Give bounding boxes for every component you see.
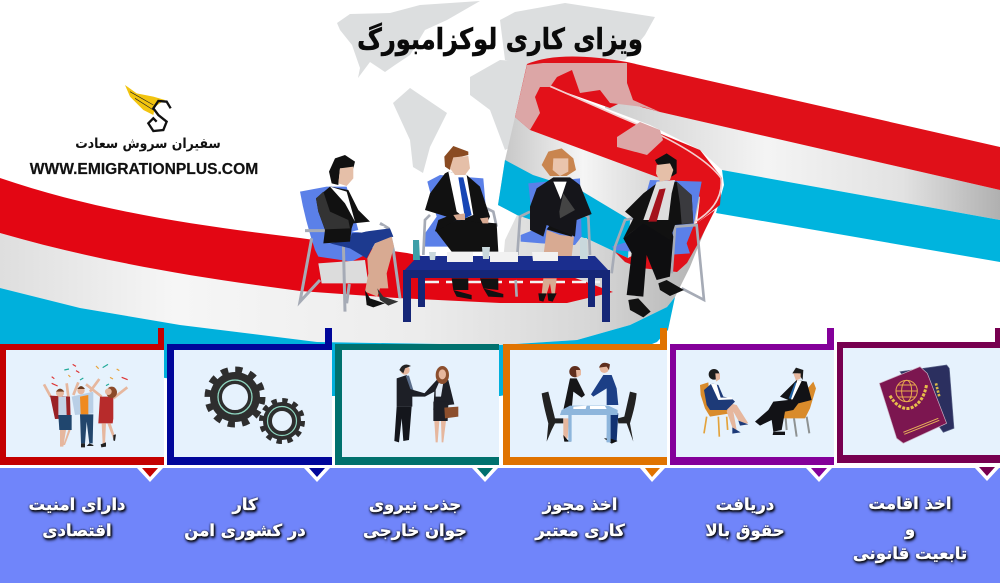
ribbon: right red curve <box>613 210 715 272</box>
label: residence and citizenship: تابعیت قانونی <box>853 544 967 563</box>
label: work in a safe country: کار <box>232 495 258 514</box>
icon: interview <box>700 368 816 437</box>
panel: work in a safe country <box>167 328 332 482</box>
person: seated man with red tie <box>612 153 704 317</box>
label: high salary <box>704 495 786 545</box>
person: seated woman with red hair <box>516 148 592 302</box>
label: attracting young foreign workers: جذب نیروی <box>369 495 461 514</box>
logo: company name: سفیران سروش سعادت <box>75 136 221 152</box>
label: economic security: اقتصادی <box>42 521 112 540</box>
ribbon: back blue band <box>716 170 1000 262</box>
label: residence and citizenship <box>852 494 970 568</box>
label: attracting young foreign workers <box>362 495 469 545</box>
label: residence and citizenship: اخذ اقامت <box>868 494 952 513</box>
ribbon: lower grey band <box>0 210 713 345</box>
label: attracting young foreign workers: جوان خارجی <box>363 521 467 540</box>
logo: yellow bird <box>125 85 171 131</box>
person: seated woman left <box>300 155 400 312</box>
panel: economic security <box>0 328 164 482</box>
conference table <box>403 238 610 322</box>
label: high salary: دریافت <box>716 495 774 514</box>
panel: valid work permit <box>503 328 667 482</box>
label: valid work permit: اخذ مجوز <box>543 495 617 514</box>
ribbon: back red band <box>527 56 1000 190</box>
icon: business meeting <box>542 363 637 444</box>
icon: celebrating people <box>44 364 128 447</box>
panel: residence and citizenship <box>837 328 1000 481</box>
panel: attracting young foreign workers <box>335 344 499 482</box>
ribbon: front white band <box>498 117 700 258</box>
conference illustration <box>300 146 704 322</box>
ribbon: front blue band <box>498 160 630 258</box>
website address: WWW.EMIGRATIONPLUS.COM <box>30 161 258 178</box>
ribbon: left red band <box>0 178 613 303</box>
world map <box>337 1 655 173</box>
title: ویزای کاری لوکزامبورگ <box>357 22 643 56</box>
label: economic security: دارای امنیت <box>29 495 125 514</box>
label: residence and citizenship: و <box>905 520 915 539</box>
label: work in a safe country <box>183 495 308 545</box>
map overlay on ribbon <box>515 63 663 155</box>
label: valid work permit: کاری معتبر <box>535 521 625 540</box>
ribbon: back white band <box>605 98 1000 220</box>
icon: gears <box>208 370 302 441</box>
icon: passports <box>879 365 954 443</box>
person: seated man with blue tie <box>423 146 503 299</box>
icon: handshake <box>394 365 458 442</box>
panel: high salary <box>670 328 834 482</box>
ribbon: left blue band <box>0 288 675 396</box>
label: work in a safe country: در کشوری امن <box>184 521 306 540</box>
ribbon: front red band <box>515 64 722 223</box>
label: economic security <box>28 495 128 543</box>
ribbon <box>0 56 1000 396</box>
label: valid work permit <box>532 495 628 544</box>
label: high salary: حقوق بالا <box>705 521 785 540</box>
timeline band <box>0 468 1000 583</box>
